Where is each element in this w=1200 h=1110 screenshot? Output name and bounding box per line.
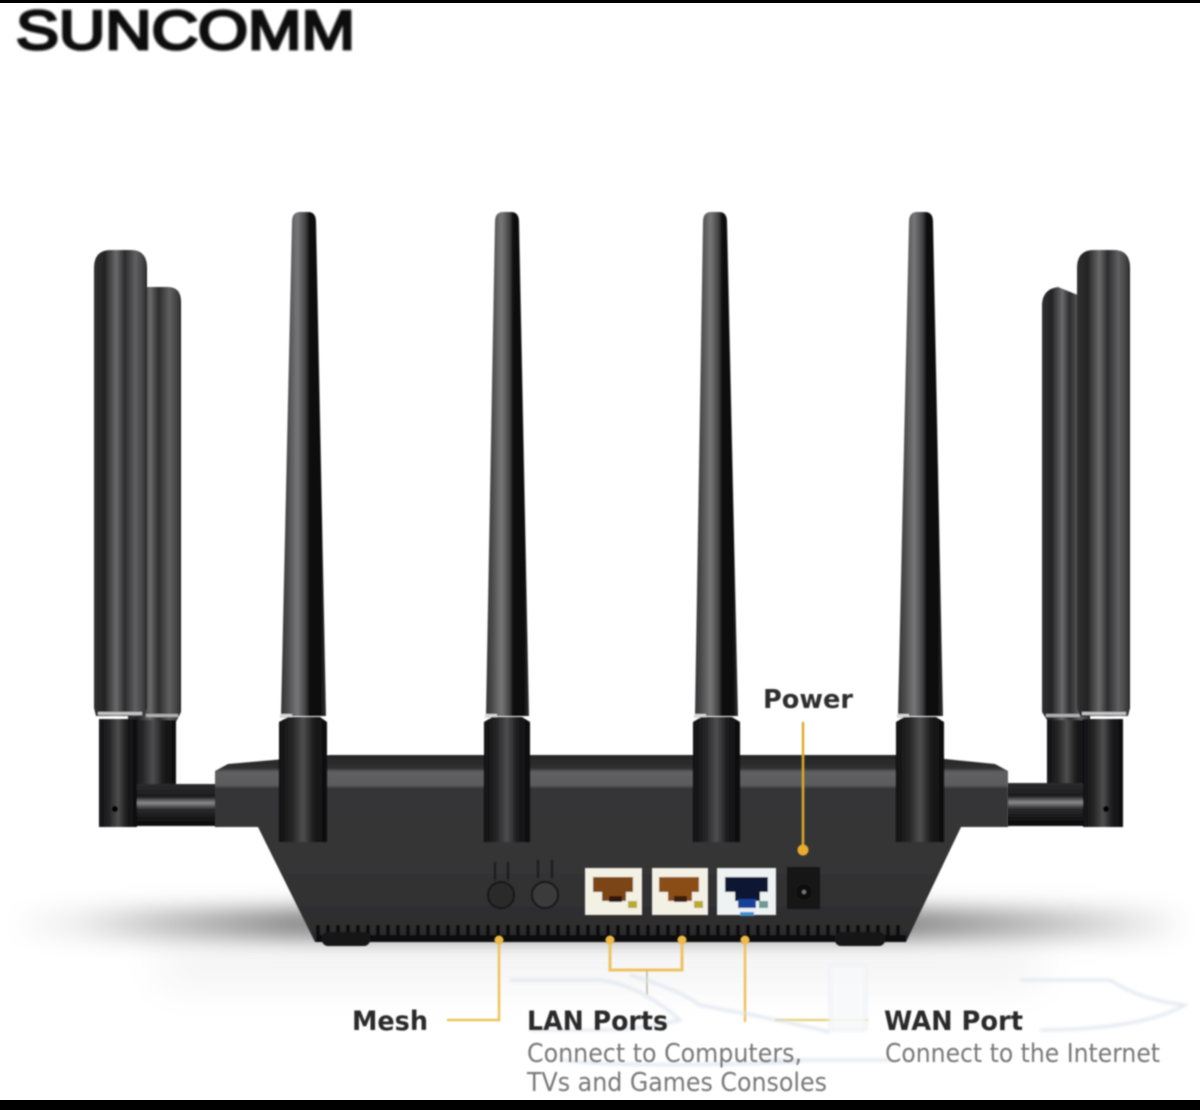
rear right antenna <box>1042 287 1090 786</box>
label: WAN Port: WAN Port <box>884 1006 1023 1037</box>
antenna 4 <box>896 212 944 842</box>
left outer antennas <box>94 250 217 827</box>
label: WAN Port <box>884 1006 1160 1069</box>
antenna 3 <box>693 212 740 842</box>
label: Power: Power <box>763 685 853 715</box>
mesh buttons <box>488 860 558 908</box>
front right antenna <box>1077 250 1130 827</box>
LAN description <box>526 1039 827 1098</box>
power leader <box>798 722 808 856</box>
floor shadow under router <box>10 908 1190 940</box>
bottom black border <box>0 1100 1200 1110</box>
label: LAN Ports: LAN Ports <box>527 1006 668 1037</box>
right connector arm <box>1007 783 1085 826</box>
antenna 1 <box>279 212 327 842</box>
antenna 2 <box>484 212 530 842</box>
WAN description: Connect to the Internet <box>885 1039 1160 1069</box>
right outer antennas <box>1007 250 1130 827</box>
rubber feet <box>322 932 370 946</box>
callout lines <box>447 722 868 1022</box>
watermark <box>510 965 1185 1065</box>
WAN leader <box>740 936 868 1022</box>
LAN port 1 <box>585 868 642 915</box>
mesh leader <box>447 936 504 1020</box>
left connector arm <box>133 784 217 826</box>
LAN port 2 <box>652 868 708 915</box>
router body <box>215 755 1008 946</box>
power jack <box>787 867 820 909</box>
WAN port <box>717 868 776 916</box>
front left antenna <box>94 250 147 827</box>
label: Mesh: Mesh <box>352 1006 428 1037</box>
centre antennas <box>279 212 944 842</box>
LAN description: TVs and Games Consoles <box>526 1068 827 1098</box>
label: LAN Ports <box>526 1006 827 1098</box>
rear left antenna <box>128 287 181 786</box>
vent slots <box>318 925 898 941</box>
LAN leader <box>606 936 686 995</box>
top black border <box>0 0 1200 3</box>
logo: SUNCOMM: SUNCOMM <box>16 0 355 61</box>
pale floor reflection <box>160 948 1040 984</box>
LAN description: Connect to Computers, <box>527 1039 802 1069</box>
